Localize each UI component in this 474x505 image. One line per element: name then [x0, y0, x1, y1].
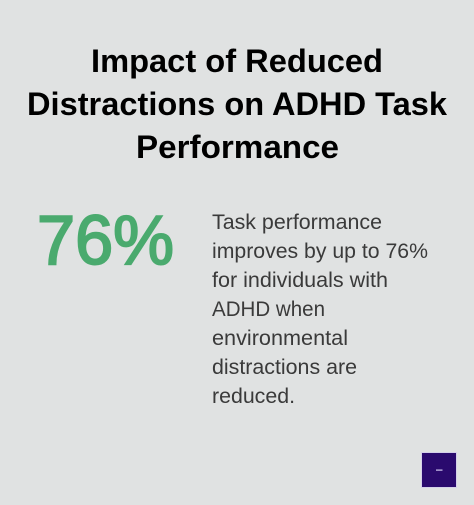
description text — [212, 210, 428, 408]
title: Performance — [136, 129, 339, 165]
description text: Task performance — [212, 210, 382, 234]
description text: reduced. — [212, 384, 295, 408]
title — [27, 43, 447, 165]
icon: navy square badge with dash — [422, 452, 456, 488]
title: Distractions on ADHD Task — [27, 86, 447, 122]
description text: environmental — [212, 326, 348, 350]
description text: distractions are — [212, 355, 357, 379]
title: Impact of Reduced — [91, 43, 383, 79]
description text: improves by up to 76% — [212, 239, 428, 263]
description text: ADHD when — [212, 297, 325, 321]
description text: for individuals with — [212, 268, 388, 292]
big statistic: 76%: 76% — [37, 201, 174, 279]
